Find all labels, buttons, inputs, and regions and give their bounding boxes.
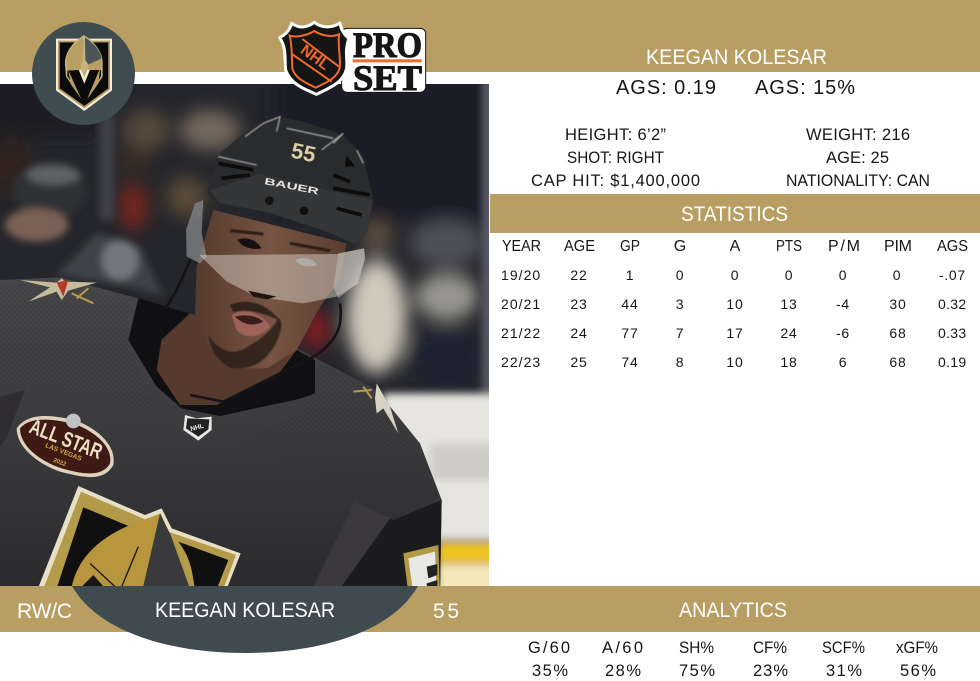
- Pro Set logo: [280, 22, 426, 98]
- row 21/22: 0.33: [938, 325, 967, 341]
- headline AGS values: AGS: 0.19: [616, 77, 716, 99]
- row 22/23: 18: [780, 354, 798, 370]
- row 21/22: -6: [836, 325, 850, 341]
- row 21/22: 77: [621, 325, 639, 341]
- player bio left: SHOT: RIGHT: [567, 149, 664, 167]
- table header: P/M: [828, 238, 860, 255]
- analytics table: 31%: [826, 662, 862, 680]
- table header: AGS: [937, 238, 968, 255]
- NHL shield: [280, 22, 349, 94]
- analytics table: 23%: [753, 662, 788, 680]
- chin strap: [166, 257, 341, 402]
- analytics table: SH%: [679, 639, 714, 657]
- row 20/21: 10: [726, 296, 744, 312]
- row 22/23: 8: [676, 354, 684, 370]
- collar: [128, 298, 315, 416]
- row 20/21: 13: [780, 296, 798, 312]
- bottom gold band: [0, 586, 980, 632]
- statistics table: [501, 238, 968, 370]
- row 19/20: 0: [893, 267, 901, 283]
- row 19/20: -.07: [939, 267, 966, 283]
- statistics heading: STATISTICS: [681, 203, 788, 226]
- PRO wordmark: PRO: [353, 25, 422, 65]
- analytics table: 35%: [532, 662, 568, 680]
- analytics table: 56%: [900, 662, 936, 680]
- logo plate: [342, 28, 426, 92]
- analytics table: CF%: [753, 639, 787, 657]
- table header: AGE: [564, 238, 595, 255]
- visor: [186, 200, 365, 303]
- player bio right: WEIGHT: 216: [806, 126, 910, 144]
- collar crest: [183, 415, 212, 441]
- analytics table: xGF%: [896, 639, 938, 657]
- position label: RW/C: [17, 600, 72, 623]
- analytics heading: ANALYTICS: [679, 599, 787, 622]
- player bio right: AGE: 25: [826, 149, 889, 167]
- row 21/22: 7: [676, 325, 684, 341]
- row 19/20: 0: [676, 267, 684, 283]
- header player name: KEEGAN KOLESAR: [646, 46, 827, 69]
- row 22/23: 6: [839, 354, 847, 370]
- face: [195, 210, 347, 368]
- shoulder star right: [353, 383, 398, 433]
- table header: YEAR: [502, 238, 541, 255]
- all-star patch: ALL STAR: [26, 414, 106, 464]
- helmet: [207, 117, 373, 245]
- row 22/23: 10: [726, 354, 744, 370]
- analytics table: G/60: [528, 639, 570, 657]
- player bio left: [531, 126, 700, 190]
- row 21/22: 68: [889, 325, 907, 341]
- headline AGS values: AGS: 15%: [755, 77, 855, 99]
- row 19/20: 22: [570, 267, 588, 283]
- row 22/23: [501, 354, 967, 370]
- row 20/21: 0.32: [938, 296, 967, 312]
- player bio left: CAP HIT: $1,400,000: [531, 172, 700, 190]
- row 22/23: 68: [889, 354, 907, 370]
- row 21/22: 24: [780, 325, 798, 341]
- headline AGS values: [616, 77, 855, 99]
- row 19/20: 0: [839, 267, 847, 283]
- analytics table: [528, 639, 938, 680]
- row 20/21: 23: [570, 296, 588, 312]
- row 20/21: 44: [621, 296, 639, 312]
- table header: [502, 238, 968, 255]
- table header: A: [730, 238, 741, 255]
- table header: GP: [620, 238, 640, 255]
- table header: PIM: [884, 238, 912, 255]
- row 22/23: 25: [570, 354, 588, 370]
- table header: PTS: [776, 238, 802, 255]
- analytics table: 28%: [605, 662, 641, 680]
- row 20/21: [501, 296, 967, 312]
- collar crest: NHL: [190, 423, 205, 433]
- row 20/21: 20/21: [501, 296, 541, 312]
- name plate text: KEEGAN KOLESAR: [155, 599, 335, 622]
- row 19/20: [501, 267, 966, 283]
- jersey number: 55: [433, 600, 459, 623]
- row 19/20: 1: [626, 267, 634, 283]
- team logo badge: [32, 22, 135, 125]
- neck: [157, 313, 300, 408]
- top gold band: [0, 0, 980, 72]
- blurred arena background: [0, 84, 489, 586]
- row 20/21: -4: [836, 296, 850, 312]
- row 22/23: 22/23: [501, 354, 541, 370]
- player bio right: [786, 126, 930, 190]
- analytics table: 75%: [679, 662, 715, 680]
- row 21/22: 24: [570, 325, 588, 341]
- player bio right: NATIONALITY: CAN: [786, 172, 930, 190]
- row 19/20: 0: [785, 267, 793, 283]
- name plate arc: [72, 586, 418, 653]
- sleeve cuff: [403, 545, 440, 586]
- NHL shield: NHL: [297, 42, 333, 74]
- jersey team logo: [36, 486, 241, 593]
- analytics table: SCF%: [822, 639, 865, 657]
- row 21/22: [501, 325, 967, 341]
- all-star patch: 2022: [52, 458, 67, 468]
- statistics band: [490, 194, 980, 233]
- shoulder star left: [20, 278, 97, 303]
- table header: G: [674, 238, 686, 255]
- row 20/21: 30: [889, 296, 907, 312]
- analytics table: A/60: [602, 639, 643, 657]
- SET wordmark: SET: [353, 58, 422, 98]
- jersey: [0, 277, 442, 593]
- row 20/21: 3: [676, 296, 684, 312]
- row 21/22: 17: [726, 325, 744, 341]
- helmet brand: BAUER: [264, 176, 320, 197]
- row 22/23: 74: [621, 354, 639, 370]
- player bio left: HEIGHT: 6’2”: [565, 126, 666, 144]
- row 22/23: 0.19: [938, 354, 967, 370]
- row 19/20: 0: [731, 267, 739, 283]
- row 21/22: 21/22: [501, 325, 541, 341]
- helmet number: 55: [289, 138, 318, 167]
- player photo: [0, 84, 489, 586]
- row 19/20: 19/20: [501, 267, 541, 283]
- all-star patch: LAS VEGAS: [44, 442, 83, 463]
